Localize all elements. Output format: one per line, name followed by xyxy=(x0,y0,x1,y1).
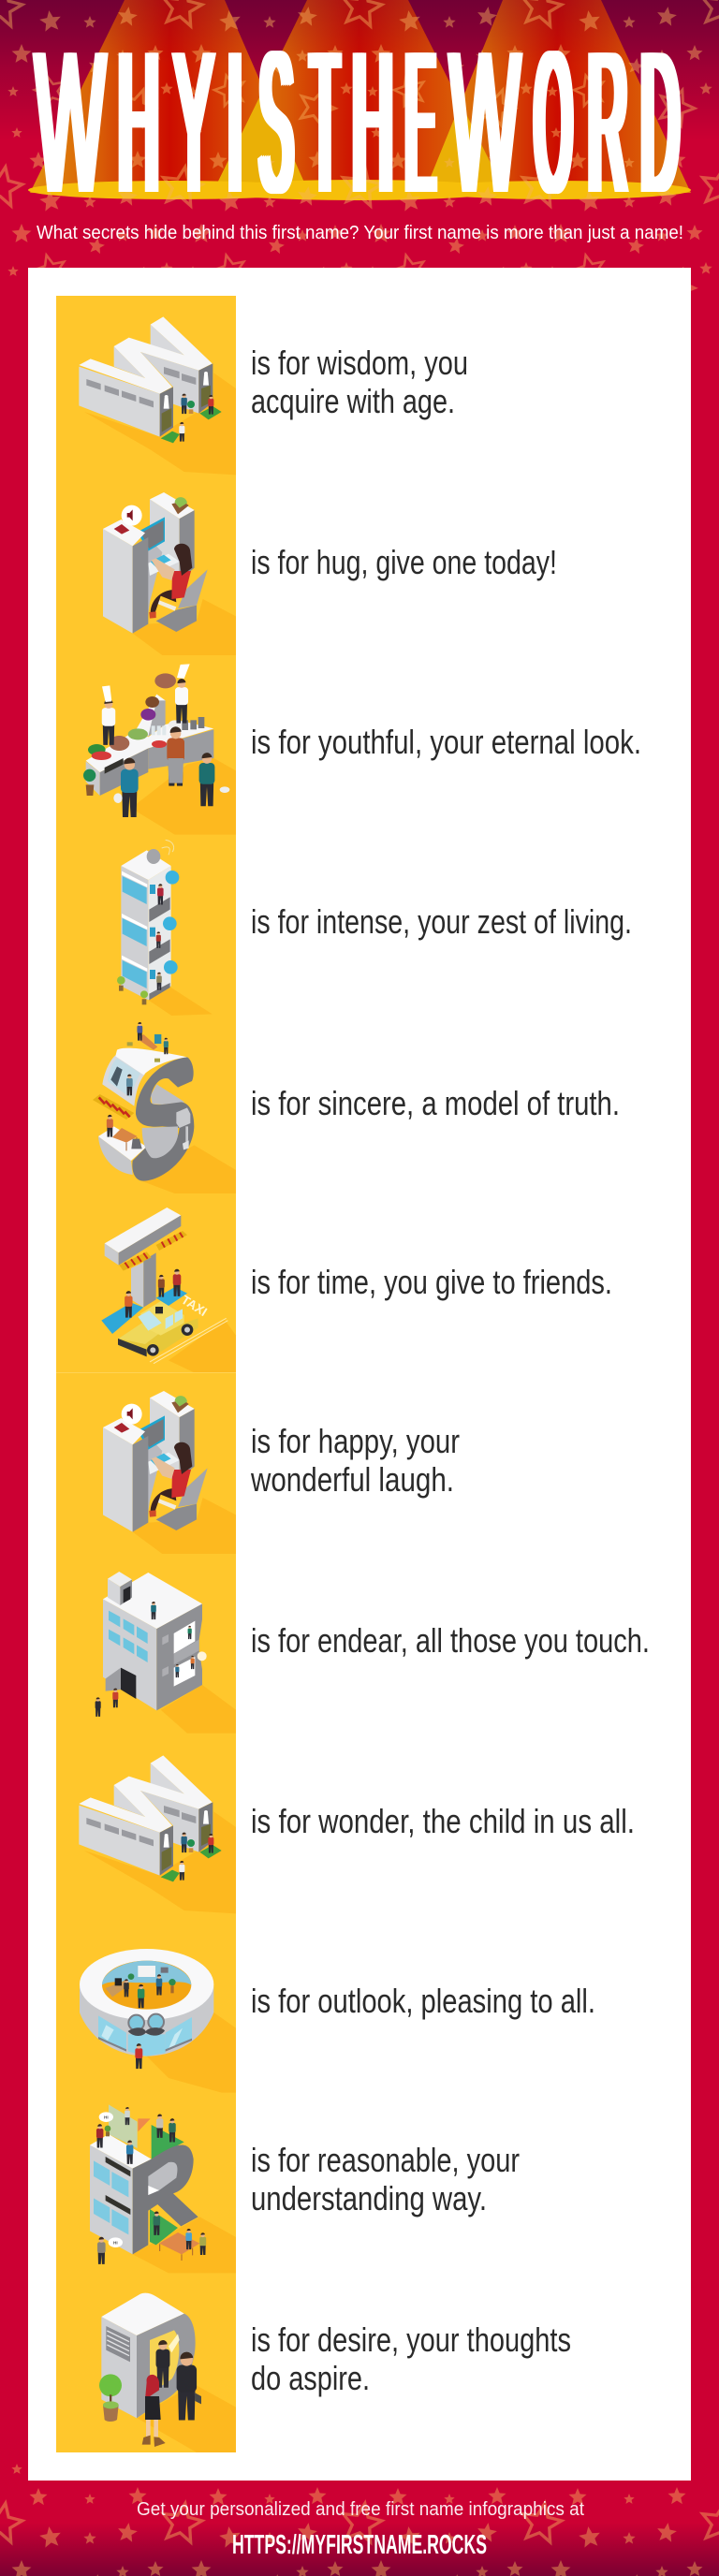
title: WHYISTHEWORD xyxy=(32,8,682,235)
title: WHYISTHEWORD: E xyxy=(405,8,434,235)
text: wonder: is for wonder, the child in us all. xyxy=(251,1802,635,1840)
icon: T taxi stand: TAXI xyxy=(179,1293,210,1319)
title: WHYISTHEWORD: W xyxy=(35,8,106,235)
text: youthful: is for youthful, your eternal look. xyxy=(251,723,641,761)
icon: S building xyxy=(93,1022,236,1193)
row W wonder xyxy=(79,1755,635,1913)
icon: Y buffet counter xyxy=(83,664,236,835)
subtitle: What secrets hide behind this first name? Your first name is more than just a name! xyxy=(37,223,683,243)
row O outlook xyxy=(80,1949,595,2093)
text: happy: is for happy, your xyxy=(251,1422,460,1460)
text: time: is for time, you give to friends. xyxy=(251,1263,612,1301)
title: WHYISTHEWORD: R xyxy=(588,8,627,235)
icon: R office building xyxy=(90,2104,236,2273)
title: WHYISTHEWORD: I xyxy=(227,8,242,235)
icon: D doorway xyxy=(99,2293,236,2452)
title: WHYISTHEWORD: S xyxy=(259,8,293,235)
title: WHYISTHEWORD: O xyxy=(535,8,572,235)
text: hug: is for hug, give one today! xyxy=(251,543,557,581)
icon: R office building: HI xyxy=(113,2240,118,2245)
row E endear xyxy=(95,1572,650,1734)
text: desire: is for desire, your thoughts xyxy=(251,2320,571,2359)
text: wisdom: acquire with age. xyxy=(251,382,455,420)
title: WHYISTHEWORD: H xyxy=(118,8,158,235)
title: WHYISTHEWORD: T xyxy=(310,8,339,235)
text: outlook: is for outlook, pleasing to all. xyxy=(251,1982,595,2020)
row I intense xyxy=(117,840,632,1016)
title: WHYISTHEWORD: Y xyxy=(173,8,214,235)
text: happy: wonderful laugh. xyxy=(250,1460,454,1499)
row T time xyxy=(56,1208,612,1373)
row W wisdom xyxy=(79,316,468,475)
spotlights: three cones with floor pools xyxy=(0,0,719,200)
yellow illustration strip xyxy=(56,296,236,2452)
text: desire: do aspire. xyxy=(251,2359,370,2397)
footer: URL: HTTPS://MYFIRSTNAME.ROCKS xyxy=(232,2530,487,2560)
text: reasonable: is for reasonable, your xyxy=(251,2141,520,2179)
row R reasonable xyxy=(90,2104,520,2273)
title: WHYISTHEWORD: D xyxy=(640,8,680,235)
icon: I office tower xyxy=(117,840,213,1016)
row H happy xyxy=(103,1391,460,1554)
text: sincere: is for sincere, a model of truth. xyxy=(251,1084,620,1122)
icon: E apartment xyxy=(95,1572,236,1734)
footer: call to action line: Get your personalized and free first name infographics at xyxy=(137,2499,584,2520)
icon: H desk building xyxy=(103,492,236,655)
text: wisdom: is for wisdom, you xyxy=(251,344,468,382)
icon: W building xyxy=(79,316,236,475)
panel: white letters panel xyxy=(28,268,691,2481)
text: intense: is for intense, your zest of living. xyxy=(251,902,632,941)
icon: O optician ring xyxy=(80,1949,236,2093)
row S sincere xyxy=(93,1022,620,1193)
text: reasonable: understanding way. xyxy=(251,2179,487,2217)
row H hug xyxy=(103,492,557,655)
row D desire xyxy=(99,2293,571,2452)
icon: T taxi stand xyxy=(56,1208,236,1373)
icon: R office building: HI xyxy=(104,2115,109,2119)
title: WHYISTHEWORD: W xyxy=(449,8,520,235)
icon: H desk building xyxy=(103,1391,236,1554)
icon: W building xyxy=(79,1755,236,1913)
title: WHYISTHEWORD: H xyxy=(352,8,393,235)
row Y youthful xyxy=(83,664,641,835)
